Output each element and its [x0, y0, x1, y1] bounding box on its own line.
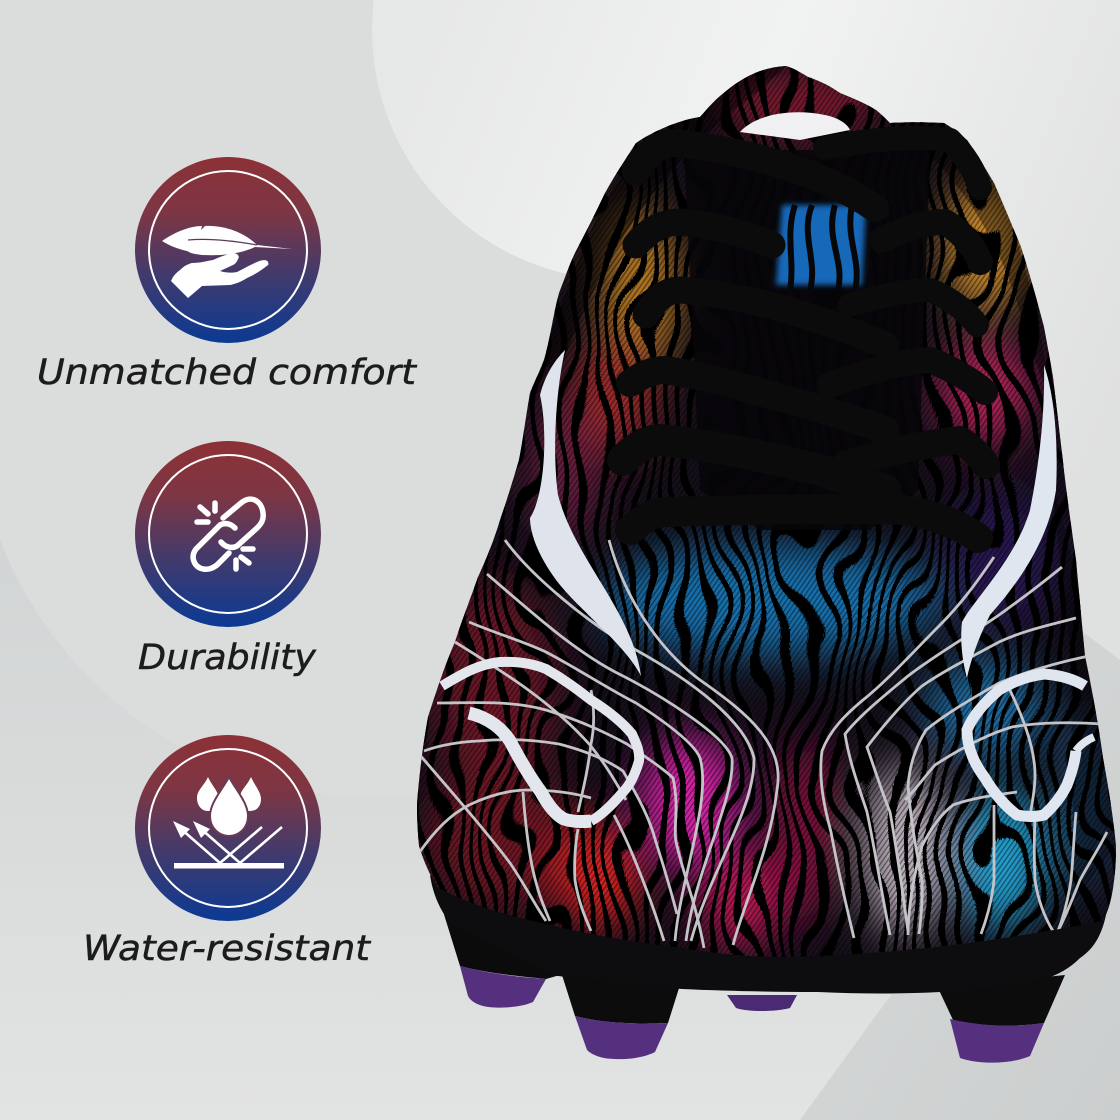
white ribbon: right flame: [961, 365, 1057, 678]
iridescent colour patches: [425, 75, 1115, 950]
stud: rear left: [442, 908, 560, 1008]
icon: broken chain link: [193, 499, 263, 569]
white ribbon: right loop: [967, 674, 1094, 816]
silver thin lines: right group: [821, 557, 1107, 938]
badge: durability: [135, 441, 321, 627]
logo badge on toe: [740, 112, 850, 140]
icon: feather and hand: [162, 226, 292, 298]
badge: unmatched comfort: [135, 157, 321, 343]
label: durability: Durability: [138, 638, 317, 678]
fine hatch texture: [400, 50, 1120, 970]
icon: water drops and reflecting arrows: [173, 777, 284, 868]
football boot photo illustration: [417, 66, 1116, 1063]
white ribbon: left loop: [442, 662, 639, 822]
tongue: panel stripes: [790, 205, 857, 290]
upper: [417, 66, 1116, 957]
stud: front right: [938, 975, 1065, 1063]
badge: water-resistant: [135, 735, 321, 921]
laces: [623, 138, 986, 538]
stud: front left: [562, 975, 680, 1059]
white ribbon: left flame: [530, 350, 641, 676]
stud: centre back: [727, 995, 797, 1011]
silver thin lines: left group: [419, 540, 778, 948]
tongue: blue panel: [776, 205, 866, 285]
sole: [430, 875, 1106, 994]
label: unmatched comfort: Unmatched comfort: [37, 353, 417, 393]
zebra wave stripes: [417, 67, 1116, 957]
dark tongue and eyestay panels: [684, 150, 930, 530]
label: water-resistant: Water-resistant: [83, 929, 371, 969]
shoe edge shading: [540, 66, 786, 370]
